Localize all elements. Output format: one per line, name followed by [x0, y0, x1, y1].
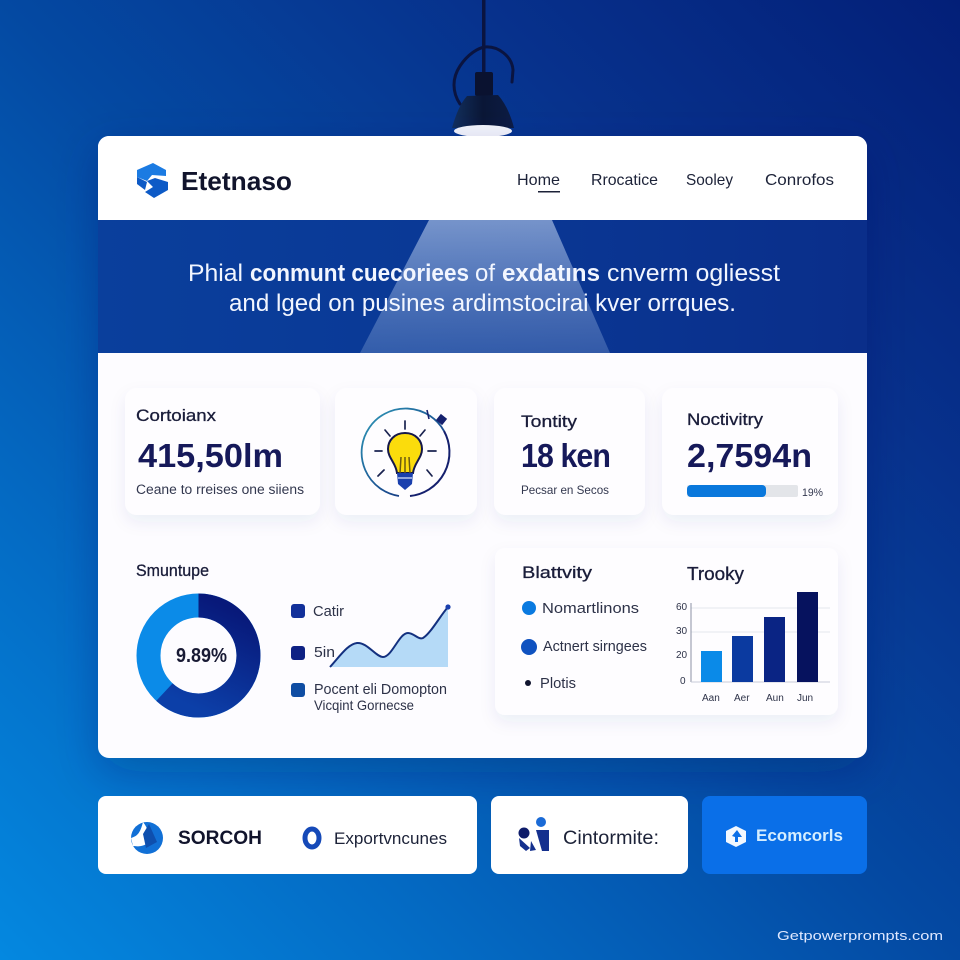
logo icon: [137, 163, 168, 198]
hero text: Phial: [188, 260, 243, 287]
stat card: tontity: 18 ken: [521, 437, 610, 474]
bar chart: Aan: [702, 693, 720, 704]
stat card: contoianx: Ceane to rreises one siiens: [136, 482, 304, 497]
navigation: [517, 172, 834, 192]
stat card: noctivitry: 2,7594n: [687, 437, 812, 474]
bottom card: sorcoh and exports: SORCOH: [178, 828, 262, 849]
panel: smuntupe: [136, 561, 451, 713]
bar chart: Aun: [766, 693, 784, 704]
bar chart: [676, 564, 830, 704]
legend: Pocent eli Domopton: [314, 681, 447, 698]
activity list: Actnert sirngees: [543, 638, 647, 655]
stat card: lightbulb icon: [335, 388, 477, 515]
panel: activity and bar chart: Blattvity: [522, 563, 593, 582]
progress bar: 19%: [802, 487, 823, 499]
hero band: [98, 220, 867, 353]
hero text: exdatıns: [502, 260, 600, 287]
main card: [98, 136, 867, 758]
activity list: [521, 600, 647, 692]
stat card: contoianx: Cortoianx: [136, 406, 217, 425]
icon: hexagon arrow: [726, 826, 746, 847]
navigation: Home: [517, 172, 560, 189]
activity list: Plotis: [540, 675, 576, 692]
bar chart: 0: [680, 676, 686, 687]
bottom card: cintormite: Cintormite:: [563, 828, 659, 849]
icon: light bulb: [362, 408, 449, 496]
legend: 5in: [314, 644, 335, 661]
icon: sorcoh: [131, 822, 163, 854]
stat card: tontity: [494, 388, 645, 515]
legend: [291, 603, 447, 713]
bottom card: sorcoh and exports: [98, 796, 477, 874]
legend: Catir: [313, 603, 344, 620]
navigation: Conrofos: [765, 172, 834, 189]
bottom card: ecomcorls: Ecomcorls: [756, 826, 843, 845]
stat card: tontity: Tontity: [521, 412, 578, 431]
bar chart: 30: [676, 626, 688, 637]
bar chart: 60: [676, 602, 688, 613]
hero text: conmunt cuecoriees: [250, 260, 469, 287]
hanging lamp: [452, 0, 514, 137]
stat card: noctivitry: [662, 388, 838, 515]
bottom card: sorcoh and exports: Exportvncunes: [334, 830, 447, 848]
bar chart: Trooky: [687, 564, 744, 584]
navigation: Sooley: [686, 172, 733, 189]
stat card: noctivitry: Noctivitry: [687, 410, 764, 429]
bottom card: ecomcorls: [702, 796, 867, 874]
activity list: Nomartlinons: [542, 600, 639, 617]
stat card: contoianx: 415,50lm: [138, 437, 283, 474]
icon: exports: [305, 829, 319, 847]
stat card: tontity: Pecsar en Secos: [521, 483, 609, 497]
bar chart: Aer: [734, 693, 750, 704]
header bar: [98, 136, 867, 220]
bar chart: 20: [676, 650, 688, 661]
logo name: Etetnaso: [181, 166, 292, 196]
hero text: [188, 260, 780, 317]
bottom card: cintormite: [491, 796, 688, 874]
bar chart: Jun: [797, 693, 813, 704]
hero text: cnverm ogliesst: [607, 260, 780, 287]
hero text: of: [475, 260, 495, 287]
navigation: Rrocatice: [591, 172, 658, 189]
donut chart: [148, 606, 248, 706]
panel: activity and bar chart: [495, 548, 838, 715]
donut chart: 9.89%: [176, 645, 227, 667]
progress bar: [687, 485, 823, 499]
icon: people: [518, 817, 549, 851]
watermark: Getpowerprompts.com: [777, 928, 943, 943]
hero text: and lged on pusines ardimstocirai kver orrques.: [229, 290, 736, 317]
stat card: contoianx: [125, 388, 320, 515]
area chart: [330, 604, 451, 667]
panel: smuntupe: Smuntupe: [136, 561, 209, 580]
legend: Vicqint Gornecse: [314, 697, 414, 713]
